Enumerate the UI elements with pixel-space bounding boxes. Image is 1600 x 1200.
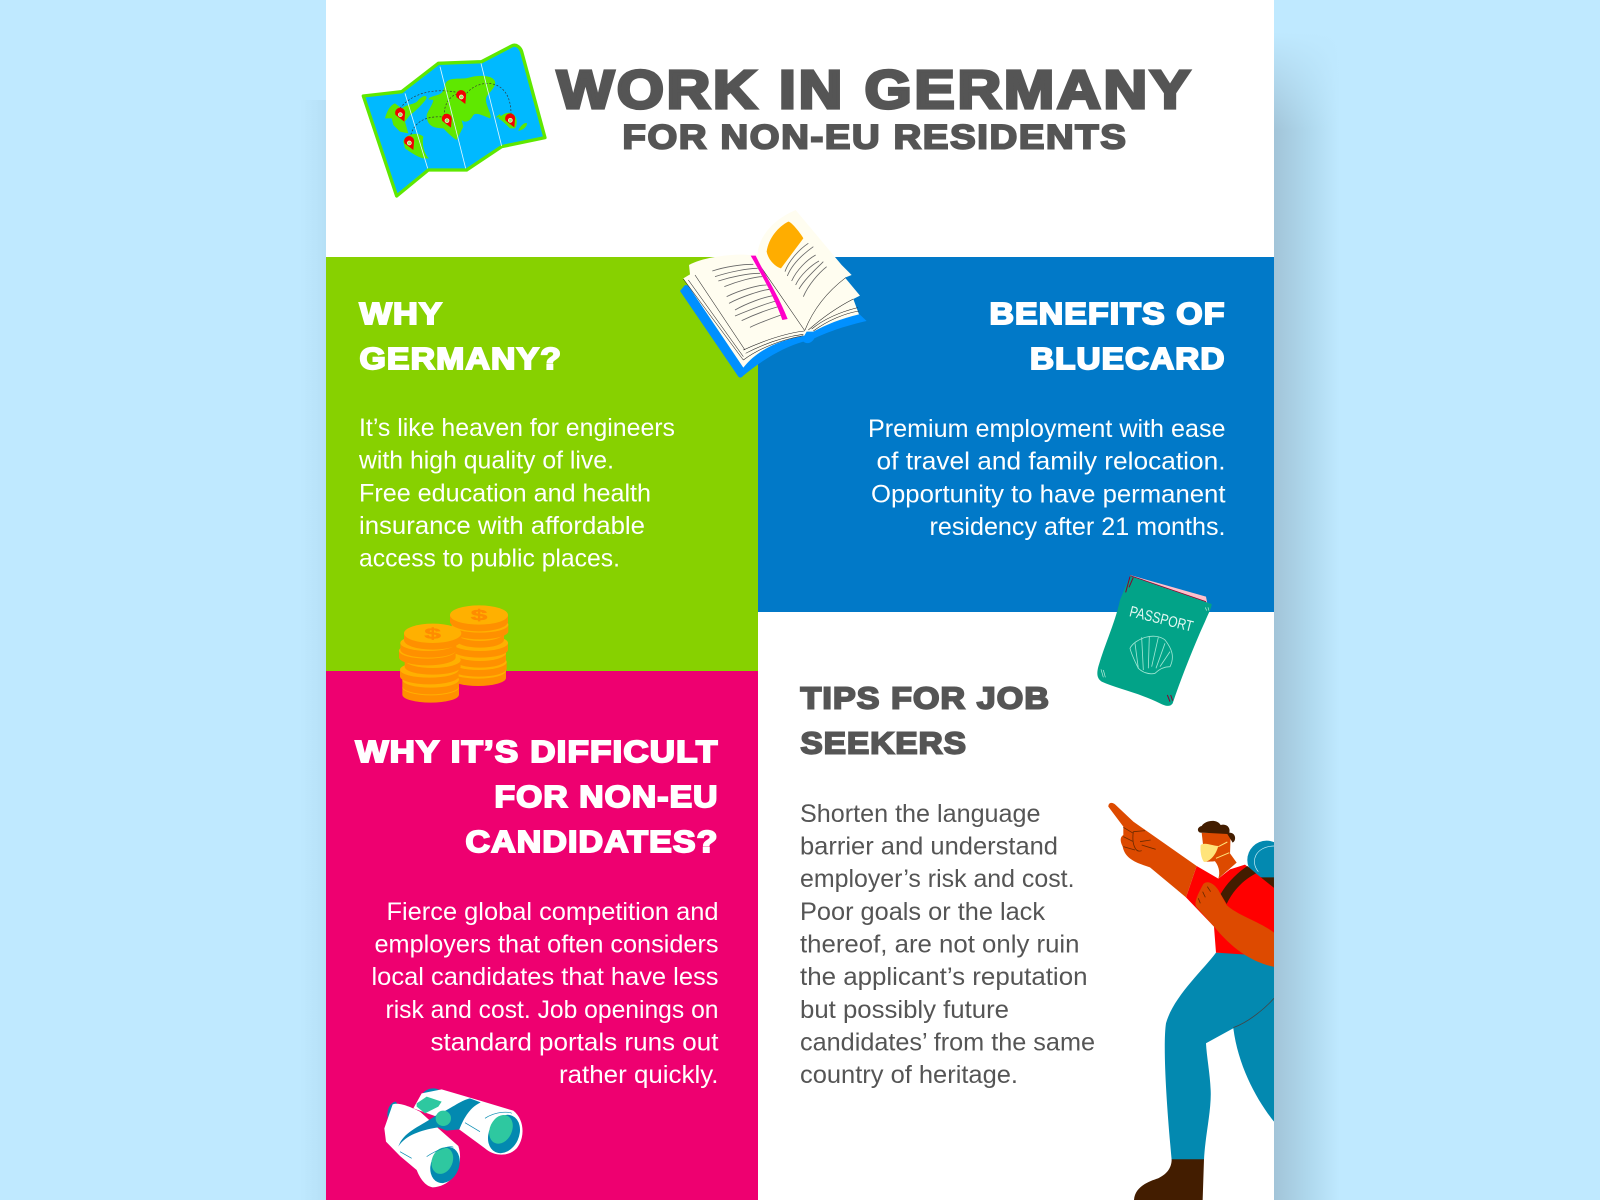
text: tips body (800, 800, 1095, 1089)
icon: passport: PASSPORT (1128, 603, 1195, 636)
text: benefits body: residency after 21 months. (930, 513, 1226, 541)
text: why Germany body: with high quality of live. (358, 447, 614, 475)
icon: traveller with backpack (1108, 803, 1286, 1200)
text: benefits body: Premium employment with ease (868, 415, 1226, 443)
panel: tips for job seekers (800, 682, 1095, 1089)
text: why difficult body: employers that often considers (374, 930, 718, 958)
text: tips body: employer’s risk and cost. (800, 865, 1074, 893)
icon: passport (1097, 575, 1212, 706)
text: tips body: barrier and understand (800, 832, 1058, 860)
icon: binoculars (384, 1088, 526, 1188)
icon: coin stacks: $ (471, 607, 487, 624)
panel: why difficult (326, 671, 758, 1200)
icon: world map (363, 45, 545, 196)
text: tips body: country of heritage. (800, 1061, 1018, 1089)
heading: why difficult: CANDIDATES? (466, 825, 718, 859)
text: tips body: the applicant’s reputation (800, 963, 1088, 991)
text: benefits body: Opportunity to have permanent (871, 480, 1226, 508)
text: tips body: but possibly future (800, 996, 1009, 1024)
text: why Germany body (358, 414, 675, 573)
text: benefits body (868, 415, 1226, 541)
text: why difficult body: standard portals runs out (430, 1028, 719, 1056)
heading: why Germany: GERMANY? (360, 342, 562, 376)
heading: why Germany: WHY (360, 297, 443, 331)
heading: tips (800, 682, 1050, 760)
heading: benefits of Bluecard: BENEFITS OF (990, 297, 1226, 331)
title: FOR NON-EU RESIDENTS (622, 118, 1128, 156)
title (557, 60, 1193, 156)
heading: why difficult (356, 735, 718, 859)
heading: tips: SEEKERS (800, 726, 967, 760)
text: why difficult body: rather quickly. (559, 1061, 718, 1089)
panel: benefits of Bluecard (758, 257, 1274, 612)
text: why Germany body: Free education and health (359, 479, 651, 507)
panel: why Germany (326, 257, 758, 671)
text: why Germany body: It’s like heaven for engineers (359, 414, 675, 442)
heading: benefits of Bluecard: BLUECARD (1030, 342, 1226, 376)
text: tips body: Shorten the language (800, 800, 1040, 828)
text: tips body: thereof, are not only ruin (800, 930, 1080, 958)
left stack (399, 624, 461, 703)
text: tips body: Poor goals or the lack (800, 898, 1046, 926)
text: why difficult body: local candidates that have less (372, 963, 718, 991)
title: WORK IN GERMANY (557, 60, 1193, 120)
icon: coin stacks (399, 605, 508, 703)
text: why difficult body (372, 898, 719, 1089)
text: why Germany body: access to public places. (359, 545, 620, 573)
text: why difficult body: risk and cost. Job openings on (386, 996, 718, 1024)
icon: open book (680, 210, 867, 378)
text: benefits body: of travel and family relocation. (876, 448, 1226, 476)
text: why difficult body: Fierce global competition and (386, 898, 718, 926)
icon: coin stacks: $ (424, 626, 441, 642)
heading: why difficult: FOR NON-EU (494, 780, 718, 814)
text: tips body: candidates’ from the same (800, 1028, 1095, 1056)
heading: tips: TIPS FOR JOB (800, 682, 1050, 716)
text: why Germany body: insurance with affordable (359, 512, 645, 540)
heading: why difficult: WHY IT’S DIFFICULT (356, 735, 718, 769)
right stack (450, 605, 508, 686)
heading: why Germany (360, 297, 562, 376)
heading: benefits of Bluecard (990, 297, 1226, 376)
